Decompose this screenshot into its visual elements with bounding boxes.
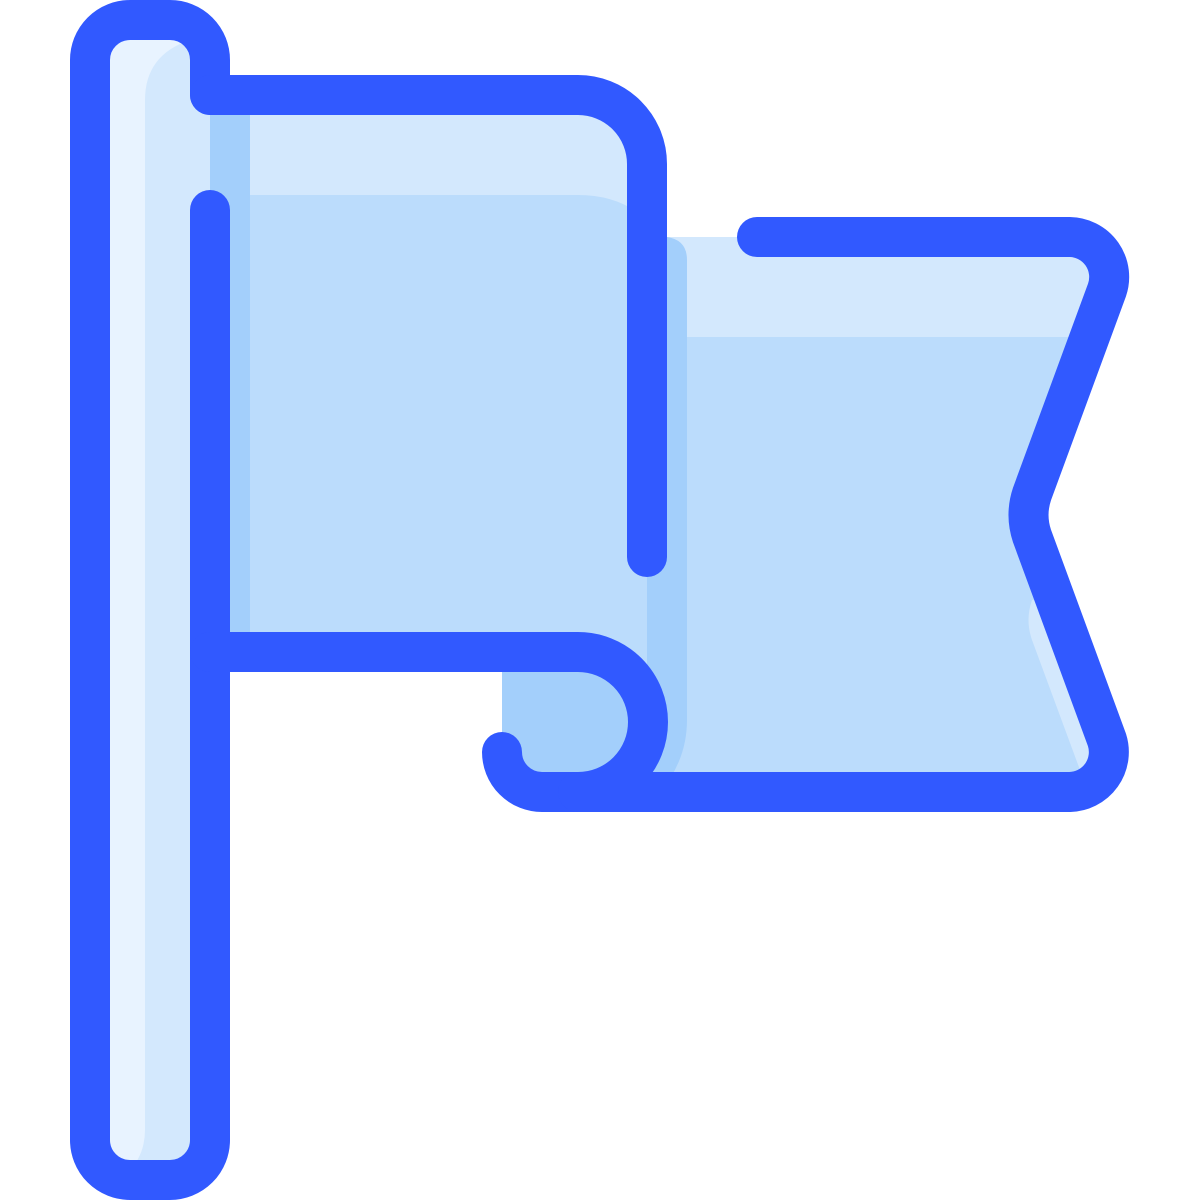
- pole fill: [90, 20, 210, 1180]
- left flag fill: [210, 95, 647, 700]
- right flag fill: [578, 237, 1105, 792]
- curl fill: [502, 652, 648, 792]
